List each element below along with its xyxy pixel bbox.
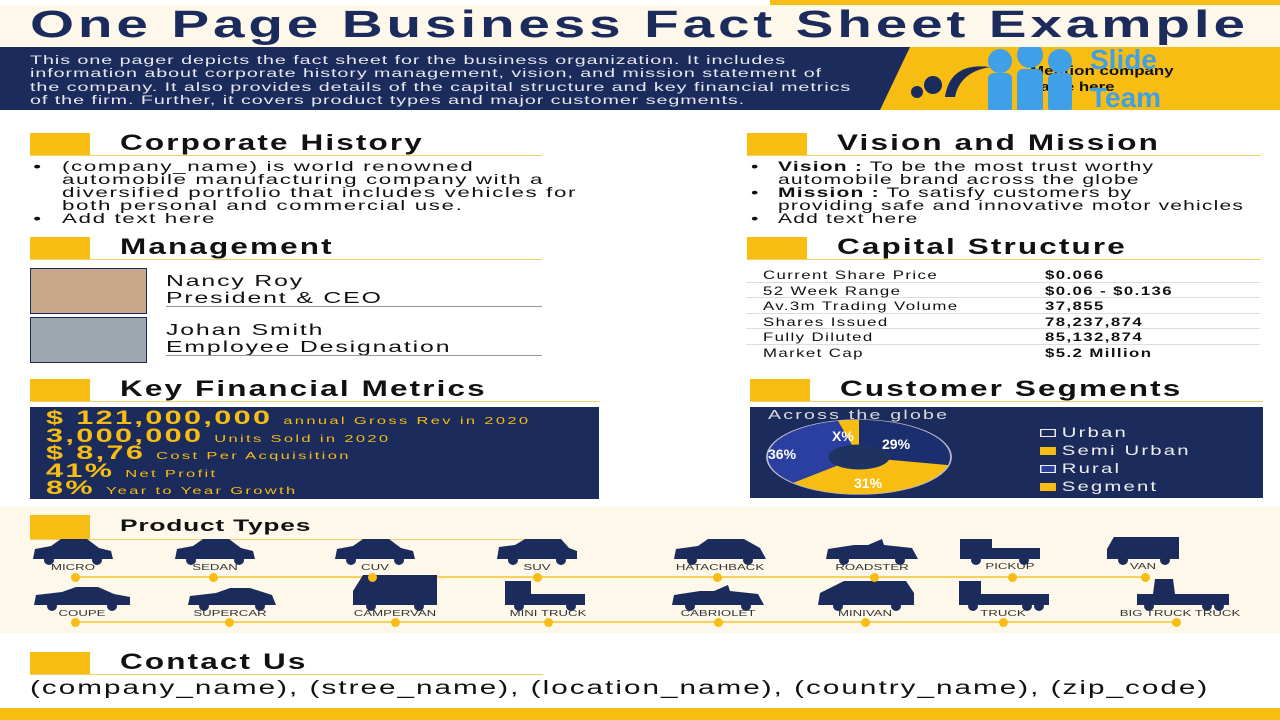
product types section: CAMPERVAN	[354, 609, 436, 618]
capital table: Market Cap	[763, 346, 864, 360]
product types section: COUPE	[59, 609, 105, 618]
product types section: CUV	[361, 563, 389, 572]
capital table: Shares Issued	[763, 315, 889, 329]
product types section: SEDAN	[192, 563, 238, 572]
capital table: 85,132,874	[1045, 330, 1143, 344]
vehicle labels: MICRO	[51, 563, 95, 572]
person 2: Johan Smith	[166, 322, 324, 339]
text: vision: Mission : To satisfy customers by	[778, 184, 1132, 200]
product types section: BIG TRUCK TRUCK	[1120, 609, 1240, 618]
heading: contact	[30, 649, 543, 675]
title: One Page Business Fact Sheet Example	[30, 4, 1249, 46]
capital table: 52 Week Range	[763, 284, 901, 298]
text: vision	[752, 158, 1244, 226]
segments panel	[750, 407, 1263, 498]
vehicle icons row	[33, 537, 1229, 611]
product types section: MINIVAN	[838, 609, 892, 618]
capital table: $5.2 Million	[1045, 346, 1152, 360]
text: vision: Add text here	[778, 210, 919, 226]
text: corporate history: Add text here	[62, 210, 216, 226]
pie chart: X%	[832, 428, 854, 444]
heading: vision: Vision and Mission	[837, 130, 1160, 155]
product types section: TRUCK	[980, 609, 1026, 618]
financial panel: 3,000,000 Units Sold in 2020	[46, 425, 390, 447]
person 1	[30, 268, 542, 314]
heading: corporate history	[30, 130, 542, 156]
capital table	[746, 268, 1260, 360]
top yellow strip	[770, 0, 1280, 5]
heading: key financial	[30, 376, 600, 402]
heading: product types	[30, 515, 525, 540]
heading: customer segments: Customer Segments	[840, 376, 1182, 401]
capital table: 78,237,874	[1045, 315, 1143, 329]
capital table: Av.3m Trading Volume	[763, 299, 958, 313]
pie chart: 31%	[854, 475, 883, 491]
product types section: PICKUP	[985, 562, 1035, 571]
text: vision: automobile brand across the globe	[778, 171, 1140, 187]
title band	[0, 5, 1280, 47]
pie chart: 36%	[768, 446, 797, 462]
text: corporate history: (company_name) is world renowned automobile manufacturing company with a diversified portfolio that includes vehicles for both personal and commercial use.	[62, 158, 577, 213]
capital table: 37,855	[1045, 299, 1105, 313]
legend: Rural	[1062, 460, 1121, 476]
heading: vision	[747, 130, 1260, 156]
logo panel: Slide	[1090, 44, 1157, 75]
heading: capital: Capital Structure	[837, 234, 1127, 259]
product types section: HATACHBACK	[676, 563, 764, 572]
contact text: (company_name), (stree_name), (location_name), (country_name), (zip_code)	[30, 678, 1209, 699]
timeline lines	[73, 576, 1143, 578]
financial panel: $ 8,76 Cost Per Acquisition	[46, 442, 351, 464]
logo panel	[880, 47, 1280, 110]
timeline dots	[71, 573, 80, 582]
heading: capital	[747, 234, 1260, 260]
product types section: ROADSTER	[835, 563, 909, 572]
person 1: President & CEO	[166, 290, 383, 307]
intro band: This one pager depicts the fact sheet for the business organization. It includes information about corporate history management, vision, and mission statement of the company. It also provides details of the capital structure and key financial metrics of the firm. Further, it covers product types and major customer segments.	[30, 53, 851, 107]
logo panel: Team	[1090, 82, 1161, 113]
text: vision: providing safe and innovative motor vehicles	[778, 197, 1244, 213]
financial panel: 8% Year to Year Growth	[46, 477, 298, 499]
financial panel	[30, 407, 599, 499]
product types section	[0, 507, 1280, 633]
logo panel: name here	[1030, 79, 1115, 94]
product types section: SUPERCAR	[193, 609, 267, 618]
heading: management: Management	[120, 234, 334, 259]
product types section: VAN	[1130, 562, 1156, 571]
financial panel: 41% Net Profit	[46, 460, 217, 482]
legend: Urban	[1062, 424, 1128, 440]
financial panel: $ 121,000,000 annual Gross Rev in 2020	[46, 407, 530, 429]
capital table: Current Share Price	[763, 268, 938, 282]
pie chart	[766, 419, 952, 495]
capital table: Fully Diluted	[763, 330, 874, 344]
product types section: MINI TRUCK	[510, 609, 586, 618]
product types section: SUV	[523, 563, 551, 572]
capital table: $0.066	[1045, 268, 1105, 282]
segments panel: Across the globe	[768, 407, 949, 422]
heading: corporate history: Corporate History	[120, 130, 424, 155]
heading: key financial: Key Financial Metrics	[120, 376, 487, 401]
heading: product types: Product Types	[120, 516, 311, 535]
person 1: Nancy Roy	[166, 273, 304, 290]
bottom bar	[0, 708, 1280, 720]
heading: management	[30, 234, 542, 260]
pie chart: 29%	[882, 436, 911, 452]
text: vision: Vision : To be the most trust worthy	[778, 158, 1154, 174]
legend: Semi Urban	[1062, 442, 1191, 458]
person 2	[30, 317, 542, 363]
heading: customer segments	[750, 376, 1263, 402]
capital table: $0.06 - $0.136	[1045, 284, 1173, 298]
legend	[1040, 424, 1191, 494]
product types section: CABRIOLET	[681, 609, 755, 618]
heading: contact: Contact Us	[120, 649, 308, 674]
logo panel: Mention company	[1030, 63, 1174, 78]
person 2: Employee Designation	[166, 339, 451, 356]
legend: Segment	[1062, 478, 1158, 494]
